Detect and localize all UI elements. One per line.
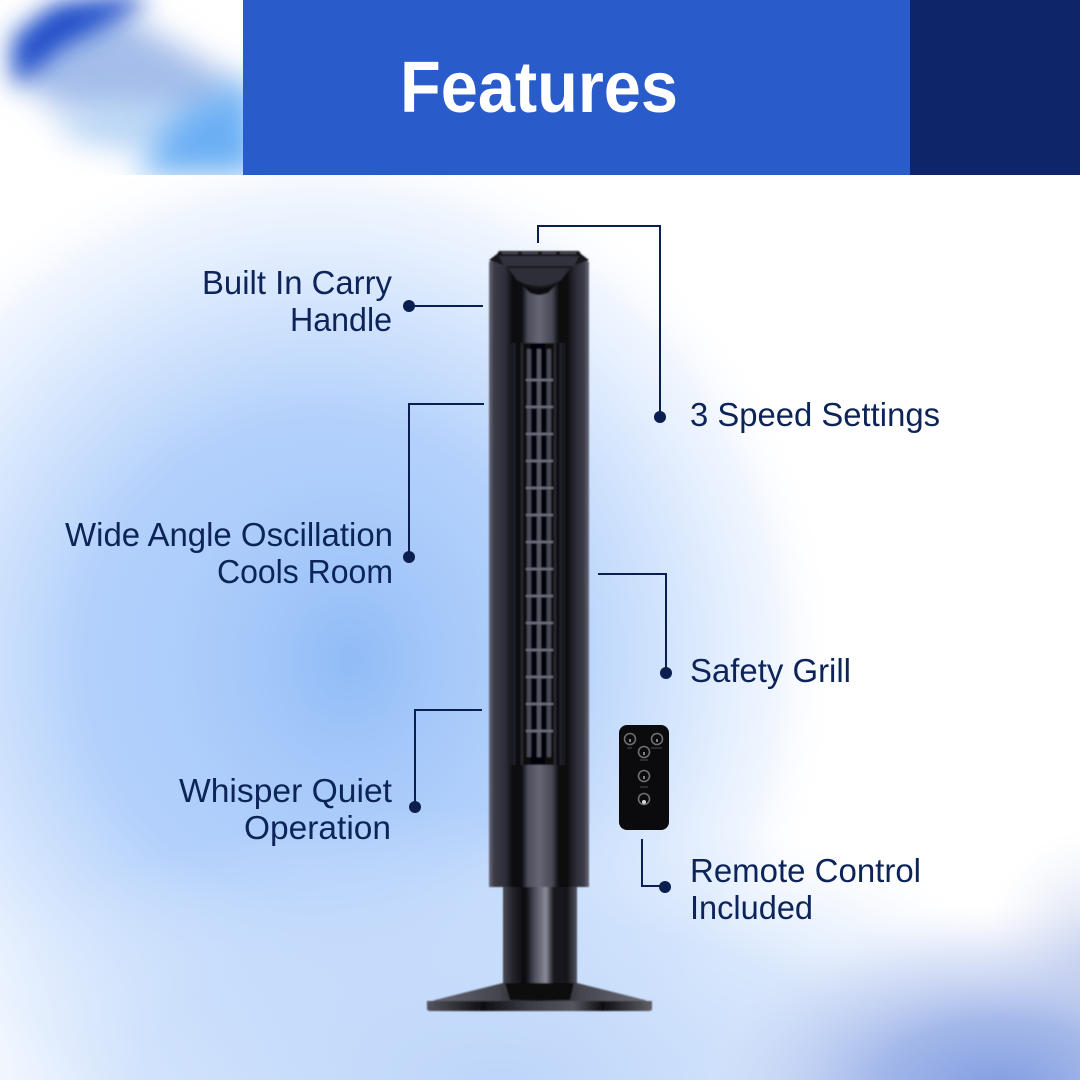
fan top control panel — [489, 251, 589, 295]
callout: safety grill: Safety Grill — [690, 652, 851, 689]
callout: 3 speed settings: 3 Speed Settings — [690, 396, 940, 433]
remote control — [619, 725, 669, 830]
callout: safety grill — [598, 574, 851, 689]
callout: whisper quiet operation: Operation — [244, 809, 391, 846]
callout: whisper quiet operation: Whisper Quiet — [179, 772, 392, 809]
callout: built in carry handle: Built In Carry — [202, 264, 392, 301]
callout: 3 speed settings — [538, 226, 940, 433]
callout: built in carry handle — [202, 264, 483, 338]
fan neck — [503, 887, 577, 983]
callout: remote control included: Included — [690, 889, 813, 926]
callout: wide angle oscillation: Wide Angle Oscillation — [65, 516, 393, 553]
fan grill — [510, 343, 565, 765]
fan body — [489, 256, 589, 887]
header: title band — [243, 0, 911, 175]
callout: wide angle oscillation: Cools Room — [217, 553, 393, 590]
callout: wide angle oscillation — [65, 404, 484, 590]
callout: remote control included — [642, 839, 921, 926]
fan base — [427, 983, 652, 1011]
header: dark navy block — [910, 0, 1080, 175]
callout: built in carry handle: Handle — [290, 301, 392, 338]
callout: remote control included: Remote Control — [690, 852, 921, 889]
callout: whisper quiet operation — [179, 710, 482, 846]
remote buttons — [624, 734, 662, 804]
tower fan — [427, 251, 652, 1011]
title: Features — [400, 48, 678, 128]
header: gradient corner — [0, 0, 260, 175]
